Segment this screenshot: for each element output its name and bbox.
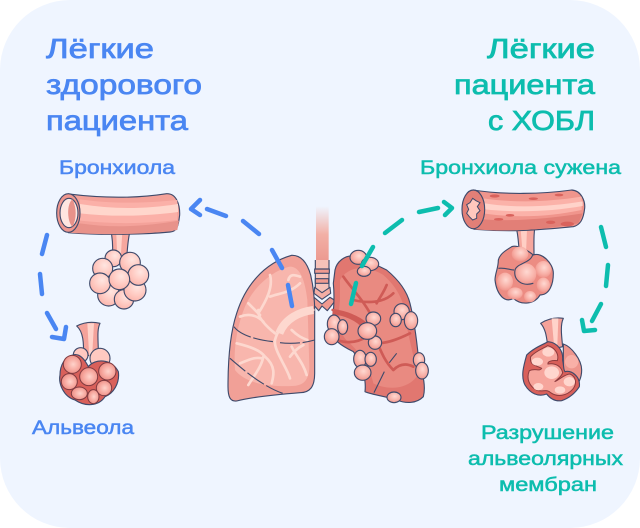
arrow: lungs to healthy bronchiole — [191, 200, 292, 306]
heading: healthy lungs: Лёгкие — [46, 33, 154, 64]
alveoli cluster: healthy — [90, 250, 149, 309]
heading: healthy lungs: пациента — [46, 105, 188, 136]
arrow: healthy bronchiole to alveolus — [40, 235, 66, 339]
label: alveolus: Альвеола — [32, 418, 134, 439]
alveolus: damaged — [523, 318, 582, 401]
trachea — [309, 206, 335, 311]
heading: COPD lungs: Лёгкие — [487, 33, 595, 64]
label: destruction of alveolar membranes: мембран — [499, 475, 597, 496]
heading: healthy lungs — [46, 33, 202, 136]
emphysema bullae — [324, 250, 428, 403]
label: destruction of alveolar membranes: Разрушение — [481, 423, 614, 444]
label: narrowed bronchiole: Бронхиола сужена — [420, 158, 622, 179]
bronchiole: narrowed — [462, 190, 585, 255]
bronchiole: healthy — [57, 194, 180, 260]
alveoli cluster: narrowed — [495, 246, 553, 303]
heading: COPD lungs: пациента — [454, 69, 595, 100]
icon: lungs — [228, 206, 428, 403]
left lung — [228, 255, 315, 401]
label: destruction of alveolar membranes — [468, 423, 624, 496]
heading: COPD lungs — [454, 33, 595, 136]
heading: healthy lungs: здорового — [46, 69, 202, 100]
arrow: COPD bronchiole to damaged alveolus — [582, 227, 608, 331]
heading: COPD lungs: с ХОБЛ — [488, 105, 595, 136]
label: destruction of alveolar membranes: альвеолярных — [468, 449, 624, 470]
alveolus: healthy cross-section — [60, 322, 119, 405]
label: bronchiole: Бронхиола — [59, 158, 176, 179]
right lung — [324, 250, 428, 403]
arrow: lungs to COPD bronchiole — [351, 202, 452, 304]
